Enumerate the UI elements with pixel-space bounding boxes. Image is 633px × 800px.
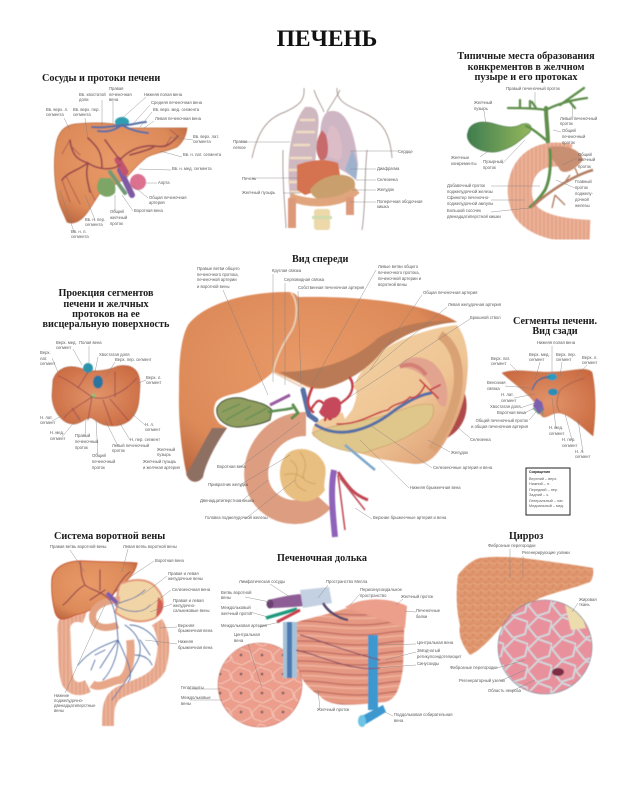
- labels: stones: проток: [578, 164, 591, 169]
- labels: portal system: Левая ветвь воротной вены: [123, 544, 177, 549]
- labels: stones: Желчные: [451, 155, 470, 160]
- heading: stones: конкрементов в желчном: [468, 62, 584, 73]
- labels: projection: Желчный пузырь: [143, 459, 177, 464]
- labels: lobule: Синусоиды: [417, 661, 439, 666]
- labels: stones: конкременты: [451, 161, 476, 166]
- labels: lobule: Желчный проток: [401, 594, 433, 599]
- labels: projection: Н. лат.: [40, 415, 53, 420]
- labels: projection: сегмент: [56, 345, 71, 350]
- leader lines: [188, 584, 416, 716]
- organ: gallbladder: [217, 398, 272, 427]
- labels: stones: Общий: [578, 152, 592, 157]
- labels: stones: проток: [575, 185, 588, 190]
- labels: stones: Правый печеночный проток: [506, 86, 560, 91]
- labels: projection: пузырь: [157, 452, 172, 457]
- labels: rear view: Н. л.: [575, 449, 584, 454]
- labels: vessels: Вв. хвостатой: [79, 92, 106, 97]
- labels: rear view: сегмент: [562, 443, 577, 448]
- labels: projection: [40, 340, 180, 470]
- legend: abbreviations: Медиальный – мед.: [529, 504, 564, 508]
- labels: vessels: [46, 86, 222, 239]
- labels: torso: Селезенка: [377, 177, 398, 182]
- labels: portal system: брыжеечная вена: [178, 645, 213, 650]
- labels: lobule: желчный проток: [221, 611, 252, 616]
- labels: rear view: сегмент: [529, 357, 544, 362]
- labels: front view: Воротная вена: [217, 464, 246, 469]
- labels: lobule: Междольковая артерия: [221, 623, 267, 628]
- labels: rear view: Хвостатая доля: [490, 404, 521, 409]
- illustration: front view organs: [179, 292, 468, 537]
- labels: lobule: [181, 579, 462, 723]
- labels: rear view: Верх. мед.: [529, 352, 550, 357]
- labels: cirrhosis: [450, 543, 597, 693]
- labels: vessels: Воротная вена: [134, 208, 163, 213]
- labels: stones: Общий: [562, 128, 576, 133]
- labels: projection: проток: [92, 465, 105, 470]
- labels: portal system: Правая и левая: [173, 598, 204, 603]
- labels: vessels: Вв. верх. мед. сегмента: [153, 107, 200, 112]
- labels: lobule: вена: [234, 638, 244, 643]
- heading: cirrhosis: Цирроз: [509, 531, 543, 542]
- leader lines: [505, 346, 587, 452]
- labels: torso: Поперечная ободочная: [377, 199, 422, 204]
- labels: vessels: сегмента: [71, 234, 89, 239]
- labels: portal system: Селезеночная вена: [172, 587, 211, 592]
- labels: stones: Пузырный: [483, 159, 504, 164]
- labels: stones: Добавочный проток: [447, 183, 485, 188]
- labels: projection: сегмент: [40, 420, 55, 425]
- labels: projection: Полая вена: [79, 340, 102, 345]
- labels: front view: Круглая связка: [272, 268, 302, 273]
- labels: front view: печеночного протока,: [378, 270, 420, 275]
- labels: projection: Верх. мед.: [56, 340, 77, 345]
- labels: lobule: Междольковые: [181, 695, 211, 700]
- organ: duodenum: [256, 424, 322, 512]
- labels: projection: Н. мед.: [50, 430, 64, 435]
- labels: projection: проток: [75, 445, 88, 450]
- labels: rear view: Н. лат.: [501, 392, 514, 397]
- labels: vessels: Общая печеночная: [149, 195, 186, 200]
- labels: projection: сегмент: [40, 361, 55, 366]
- panel: liver lobule: [181, 553, 462, 730]
- labels: front view: Верхние брыжеечные артерия и вена: [373, 515, 447, 520]
- organ: stomach: [312, 325, 468, 464]
- illustration: cirrhosis: [457, 557, 595, 698]
- labels: vessels: печеночная: [109, 92, 132, 97]
- labels: torso: Желудок: [377, 187, 394, 192]
- labels: lobule: Лимфатическая сосуды: [239, 579, 285, 584]
- labels: rear view: сегмент: [549, 431, 564, 436]
- labels: lobule: Ветвь воротной: [221, 590, 252, 595]
- labels: stones: проток: [560, 121, 573, 126]
- legend: abbreviations: Верхний – верх.: [529, 477, 557, 481]
- labels: lobule: Центральная вена: [417, 640, 454, 645]
- labels: front view: Привратник желудка: [208, 482, 249, 487]
- labels: torso: Правое: [233, 139, 248, 144]
- labels: cirrhosis: Жировая: [579, 597, 597, 602]
- heading: front view: Вид спереди: [292, 254, 348, 265]
- leader lines: [480, 92, 577, 212]
- labels: portal system: поджелудочно-: [54, 698, 84, 703]
- labels: front view: Правые ветви общего: [197, 266, 240, 271]
- labels: lobule: вена: [394, 718, 404, 723]
- labels: vessels: Общий: [110, 209, 124, 214]
- labels: lobule: Центральная: [234, 632, 260, 637]
- labels: lobule: Междольковый: [221, 605, 251, 610]
- labels: torso: Диафрагма: [377, 166, 400, 171]
- labels: portal system: вены: [54, 708, 64, 713]
- labels: lobule: Гепатоциты: [181, 685, 204, 690]
- title: ПЕЧЕНЬ: [277, 26, 377, 52]
- labels: vessels: Вв. н. лат. сегмента: [183, 152, 222, 157]
- labels: portal system: [50, 544, 213, 713]
- illustration: gallbladder and duodenum: [467, 88, 593, 232]
- labels: torso: Печень: [242, 176, 257, 181]
- labels: stones: желчный: [578, 157, 596, 162]
- labels: torso: Сердце: [398, 149, 413, 154]
- labels: vessels: Вв. верх. л.: [46, 107, 68, 112]
- labels: front view: Серповидная связка: [284, 277, 325, 282]
- labels: stones: печеночный: [562, 134, 586, 139]
- labels: cirrhosis: ткань: [579, 602, 590, 607]
- legend: abbreviations: Сокращения: [529, 470, 550, 474]
- leader lines: [243, 142, 398, 202]
- labels: projection: Желчный: [157, 447, 176, 452]
- labels: projection: печеночный: [75, 439, 99, 444]
- labels: front view: Собственная печеночная артерия: [298, 285, 364, 290]
- organ: liver: [179, 292, 457, 482]
- organ: pancreas body: [312, 404, 434, 453]
- labels: rear view: сегмент: [582, 360, 597, 365]
- labels: rear view: Венозная: [487, 380, 506, 385]
- vessels: splenic: [316, 393, 431, 432]
- labels: projection: Верх. пер. сегмент: [115, 357, 152, 362]
- heading: projection: висцеральную поверхность: [43, 319, 170, 330]
- legend: abbreviations: Передний – пер.: [529, 488, 558, 492]
- labels: rear view: Верх. л.: [582, 355, 597, 360]
- labels: stones: пузырь: [474, 106, 489, 111]
- organ: left lobe underside: [279, 321, 457, 388]
- labels: torso: кишка: [377, 204, 389, 209]
- labels: projection: проток: [112, 448, 125, 453]
- labels: cirrhosis: Фиброзные перегородки: [488, 543, 536, 548]
- organ: pancreas head: [280, 449, 326, 502]
- labels: lobule: вены: [221, 595, 231, 600]
- labels: vessels: сегмента: [193, 139, 211, 144]
- labels: vessels: Аорта: [158, 180, 170, 185]
- leader lines: [223, 270, 470, 519]
- heading: portal system: Система воротной вены: [54, 531, 165, 542]
- labels: lobule: Печеночные: [416, 608, 441, 613]
- organ: white omental opening: [338, 387, 356, 419]
- labels: rear view: сегмент: [501, 398, 516, 403]
- labels: rear view: [471, 340, 597, 459]
- labels: vessels: сегмента: [73, 112, 91, 117]
- labels: portal system: желудочные вены: [168, 576, 203, 581]
- labels: vessels: проток: [110, 221, 123, 226]
- panel: portal vein system: [50, 531, 213, 726]
- panel: cirrhosis: [450, 531, 597, 698]
- labels: vessels: Нижняя полая вена: [144, 92, 183, 97]
- labels: projection: сегмент: [146, 380, 161, 385]
- labels: rear view: Общий печеночный проток: [476, 418, 528, 423]
- labels: cirrhosis: Область некроза: [488, 688, 522, 693]
- labels: front view: Селезеночные артерия и вена: [433, 465, 493, 470]
- labels: portal system: Нижняя: [178, 639, 193, 644]
- labels: cirrhosis: Регенераторный узелок: [459, 678, 505, 683]
- labels: vessels: Вв. верх. лат.: [193, 134, 219, 139]
- labels: rear view: сегмент: [575, 454, 590, 459]
- labels: projection: печеночный: [92, 459, 116, 464]
- labels: lobule: Желчный проток: [317, 707, 349, 712]
- labels: cirrhosis: Регенерирующие узлики: [522, 550, 570, 555]
- labels: projection: Общий: [92, 453, 106, 458]
- labels: lobule: Пространство Мелла: [326, 579, 368, 584]
- labels: front view: Нижняя брыжеечная вена: [410, 485, 461, 490]
- labels: portal system: Нижние: [54, 693, 70, 698]
- labels: rear view: Верх. лат.: [491, 356, 510, 361]
- labels: front view: Головка поджелудочной железы: [205, 515, 268, 520]
- leader lines: [65, 549, 177, 693]
- labels: portal system: желудочно-: [173, 603, 196, 608]
- labels: portal system: Правая и левая: [168, 571, 199, 576]
- heading: vessels: Сосуды и протоки печени: [42, 73, 160, 84]
- labels: vessels: сегмента: [85, 222, 103, 227]
- labels: projection: сегмент: [145, 427, 160, 432]
- illustration: visceral surface: [52, 363, 140, 426]
- labels: projection: сегмент: [50, 436, 65, 441]
- labels: rear view: Нижняя полая вена: [537, 340, 576, 345]
- vessels: mesenteric: [332, 470, 335, 537]
- labels: front view: и воротной вены: [197, 284, 229, 289]
- labels: rear view: связка: [487, 386, 500, 391]
- labels: stones: Сфинктер печеночно-: [447, 195, 490, 200]
- labels: lobule: Звёздчатый: [417, 648, 441, 653]
- illustration: torso organs: [252, 88, 392, 230]
- labels: vessels: Средняя печеночная вена: [151, 100, 203, 105]
- labels: stones: поджелудочной железы: [447, 189, 493, 194]
- labels: vessels: Правая: [109, 86, 123, 91]
- labels: vessels: вена: [109, 97, 119, 102]
- labels: stones: проток: [483, 165, 496, 170]
- labels: vessels: Вв. н. пер.: [85, 217, 105, 222]
- labels: lobule: Перисинусоидальное: [360, 587, 403, 592]
- heading: projection: Проекция сегментов: [58, 288, 154, 299]
- labels: vessels: артерия: [149, 200, 165, 205]
- labels: projection: лат.: [40, 356, 47, 361]
- labels: stones: Главный: [575, 179, 592, 184]
- heading: projection: печени и желчных: [63, 299, 150, 310]
- labels: front view: [197, 264, 501, 520]
- heading: projection: протоков на ее: [72, 309, 140, 320]
- panel: visceral projection: [40, 288, 180, 470]
- labels: projection: Н. л.: [145, 422, 154, 427]
- labels: stones: поджелудочной ампулы: [447, 201, 493, 206]
- heading: segments: Сегменты печени.: [513, 316, 597, 327]
- labels: rear view: сегмент: [491, 361, 506, 366]
- labels: portal system: сальниковые вены: [173, 608, 209, 613]
- labels: front view: Желудок: [451, 450, 468, 455]
- labels: projection: Н. пер. сегмент: [130, 437, 160, 442]
- labels: projection: Хвостатая доля: [99, 352, 130, 357]
- labels: lobule: пространство: [360, 593, 387, 598]
- legend: abbreviations: Латеральный – лат.: [529, 499, 564, 503]
- organ: spleen: [440, 385, 467, 438]
- labels: front view: Селезенка: [470, 437, 491, 442]
- labels: stones: железы: [575, 203, 590, 208]
- labels: front view: печеночной артерии: [197, 277, 237, 282]
- legend: abbreviations: Задний – з.: [529, 493, 549, 497]
- leader lines: [60, 97, 193, 232]
- labels: projection: Верх.: [40, 350, 51, 355]
- labels: front view: печеночного протока,: [197, 272, 239, 277]
- labels: portal system: Воротная вена: [155, 558, 184, 563]
- labels: rear view: Н. мед.: [549, 425, 563, 430]
- labels: front view: Левые ветви общего: [378, 264, 419, 269]
- labels: vessels: Вв. н. мед. сегмента: [172, 166, 212, 171]
- vessels: hilum: [303, 390, 316, 420]
- heading: lobule: Печеночная долька: [277, 553, 367, 564]
- labels: front view: Общая печеночная артерия: [423, 290, 477, 295]
- labels: projection: Левый печеночный: [112, 443, 150, 448]
- labels: stones: Большой сосочек: [447, 208, 481, 213]
- leader lines: [497, 549, 578, 691]
- labels: stones: проток: [562, 140, 575, 145]
- illustration: lobule: [215, 587, 407, 730]
- legend: abbreviations: Нижний – н.: [529, 482, 550, 486]
- labels: torso: легкое: [233, 145, 247, 150]
- labels: stones: поджелу-: [575, 191, 593, 196]
- labels: rear view: Верх. пер.: [556, 352, 576, 357]
- heading: segments: Вид сзади: [532, 326, 578, 337]
- labels: vessels: Вв. верх. пер.: [73, 107, 100, 112]
- illustration: portal system: [52, 561, 163, 726]
- labels: front view: Брюшной ствол: [470, 315, 501, 320]
- labels: vessels: сегмента: [46, 112, 64, 117]
- illustration: rear view: [502, 369, 595, 436]
- leader lines: [52, 346, 146, 456]
- labels: stones: двенадцатиперстной кишки: [447, 214, 501, 219]
- labels: portal system: брыжеечная вена: [178, 628, 213, 633]
- illustration: liver vessels: [54, 117, 187, 223]
- panel: torso location: [233, 88, 422, 230]
- panel: liver segments rear view: [471, 316, 597, 459]
- labels: torso: Желчный пузырь: [242, 190, 276, 195]
- labels: front view: воротной вены: [378, 282, 407, 287]
- labels: stones: [447, 86, 598, 219]
- labels: portal system: Верхняя: [178, 623, 194, 628]
- labels: vessels: Вв. н. л.: [71, 229, 87, 234]
- labels: rear view: сегмент: [556, 357, 571, 362]
- labels: projection: и желчная артерия: [143, 465, 180, 470]
- labels: cirrhosis: Фиброзные перегородки: [450, 665, 498, 670]
- labels: stones: Желчный: [474, 100, 493, 105]
- labels: rear view: Н. пер.: [562, 437, 575, 442]
- labels: portal system: Правая ветвь воротной вены: [50, 544, 106, 549]
- panel: front view: [179, 254, 501, 537]
- labels: vessels: желчный: [110, 215, 128, 220]
- heading: stones: Типичные места образования: [457, 51, 595, 62]
- labels: stones: дочной: [575, 197, 590, 202]
- labels: lobule: вены: [181, 701, 191, 706]
- legend: abbreviations: [526, 468, 570, 515]
- labels: vessels: доли: [79, 97, 89, 102]
- panel: vessels and ducts of the liver: [42, 73, 222, 239]
- labels: torso: [233, 139, 422, 209]
- labels: rear view: Воротная вена: [497, 410, 526, 415]
- ligament: [273, 293, 304, 388]
- labels: projection: Правый: [75, 433, 91, 438]
- labels: front view: Двенадцатиперстная кишка: [200, 498, 255, 503]
- heading: stones: пузыре и его протоках: [474, 72, 578, 83]
- labels: vessels: Левая печеночная вена: [155, 116, 202, 121]
- labels: lobule: ретикулоэндотелиоцит: [417, 654, 462, 659]
- labels: rear view: и общая печеночная артерия: [471, 424, 528, 429]
- labels: lobule: Поддольковая собирательная: [394, 712, 453, 717]
- labels: projection: Верх. л.: [146, 375, 161, 380]
- panel: typical stone locations: [447, 51, 598, 232]
- labels: front view: печеночной артерии и: [378, 276, 422, 281]
- labels: front view: Левая желудочная артерия: [448, 302, 501, 307]
- labels: portal system: двенадцатиперстные: [54, 703, 96, 708]
- labels: stones: Левый печеночный: [560, 116, 598, 121]
- labels: lobule: балки: [416, 614, 428, 619]
